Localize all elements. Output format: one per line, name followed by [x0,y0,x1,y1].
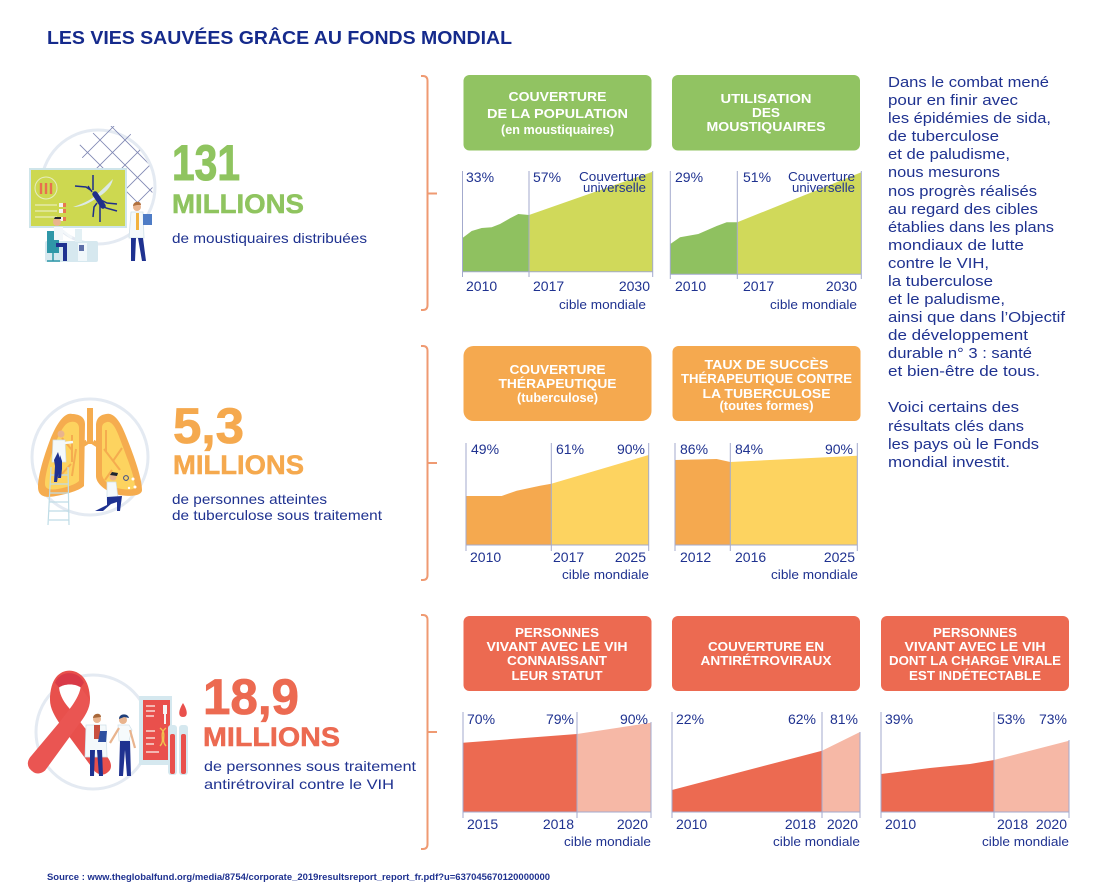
chart: charge virale indétectable: 73% [1039,711,1067,727]
chart: couverture thérapeutique: cible mondiale [562,567,649,582]
chart: couverture en antirétroviraux: 81% [830,711,858,727]
chart: connaissant leur statut: 2015 [467,816,498,832]
chart: couverture en antirétroviraux [672,711,860,849]
chart: connaissant leur statut: cible mondiale [564,834,651,849]
text block: intro: de développement [888,327,1029,344]
chart: utilisation des moustiquaires [670,169,861,312]
chart: couverture thérapeutique: 2010 [470,549,501,565]
chart: couverture en antirétroviraux: cible mondiale [773,834,860,849]
stat: 5,3 millions: MILLIONS [173,450,304,480]
chart: couverture thérapeutique: 61% [556,441,584,457]
text block: intro: nos progrès réalisés [888,183,1037,200]
title: LES VIES SAUVÉES GRÂCE AU FONDS MONDIAL [47,27,512,48]
text block: intro: établies dans les plans [888,219,1054,236]
text block: intro: au regard des cibles [888,201,1038,218]
header: couverture thérapeutique: COUVERTURE [510,362,606,377]
chart: couverture thérapeutique [466,441,649,582]
header: personnes connaissant leur statut: LEUR STATUT [512,668,603,683]
header: personnes connaissant leur statut: CONNAISSANT [507,653,607,668]
header: taux de succès thérapeutique: (toutes formes) [720,398,814,413]
bracket: tuberculosis [421,346,437,580]
header: utilisation des moustiquaires [672,75,860,150]
header: couverture en antirétroviraux: COUVERTURE EN [708,639,824,654]
chart: charge virale indétectable: 53% [997,711,1025,727]
chart: connaissant leur statut: 90% [620,711,648,727]
text block: intro: ainsi que dans l’Objectif [888,309,1066,326]
text block: intro: contre le VIH, [888,255,989,272]
stat: 5,3 millions: de tuberculose sous traitement [172,507,382,523]
chart: couverture de la population: 2030 [619,278,650,294]
header: personnes connaissant leur statut [464,616,652,691]
text block: intro: nous mesurons [888,164,1000,181]
chart: couverture de la population: Couverture [579,169,646,184]
text block: intro: durable n° 3 : santé [888,345,1032,362]
chart: charge virale indétectable: 2018 [997,816,1028,832]
chart: taux de succès thérapeutique: 2025 [824,549,855,565]
header: charge virale indétectable [881,616,1069,691]
chart: utilisation des moustiquaires: 29% [675,169,703,185]
chart: couverture thérapeutique: 90% [617,441,645,457]
header: couverture de la population [464,75,652,150]
chart: utilisation des moustiquaires: 2010 [675,278,706,294]
text block: intro: et bien-être de tous. [888,363,1040,380]
header: personnes connaissant leur statut: VIVANT AVEC LE VIH [486,639,628,654]
chart: couverture thérapeutique: 49% [471,441,499,457]
header: couverture de la population: DE LA POPULATION [487,106,628,121]
text block: intro: Dans le combat mené [888,74,1049,91]
chart: connaissant leur statut: 2020 [617,816,648,832]
source: Source : www.theglobalfund.org/media/8754/corporate_2019resultsreport_report_fr.pdf?u=637045670120000000 [47,872,550,882]
header: charge virale indétectable: PERSONNES [933,625,1017,640]
chart: couverture thérapeutique: 2017 [553,549,584,565]
chart: connaissant leur statut: 70% [467,711,495,727]
stat: 5,3 millions: 5,3 [173,398,244,454]
chart: charge virale indétectable: 2020 [1036,816,1067,832]
header: couverture en antirétroviraux [672,616,860,691]
bracket: malaria [421,76,437,310]
stat: 18,9 millions: 18,9 [203,669,299,725]
chart: charge virale indétectable [881,711,1069,849]
chart: taux de succès thérapeutique: 2016 [735,549,766,565]
chart: couverture en antirétroviraux: 2018 [785,816,816,832]
chart: couverture thérapeutique: 2025 [615,549,646,565]
text block: intro: et de paludisme, [888,146,1010,163]
chart: charge virale indétectable: 39% [885,711,913,727]
chart: utilisation des moustiquaires: 2030 [826,278,857,294]
stat: 18,9 millions: MILLIONS [203,722,340,752]
header: charge virale indétectable: DONT LA CHARGE VIRALE [889,653,1061,668]
illustration: HIV ribbon [28,671,188,789]
text block: intro: les épidémies de sida, [888,110,1051,127]
text block: intro: de tuberculose [888,128,999,145]
stat: 131 millions: MILLIONS [172,189,304,219]
text block: intro: Voici certains des [888,399,1019,416]
header: taux de succès thérapeutique: LA TUBERCULOSE [702,386,831,401]
header: utilisation des moustiquaires: MOUSTIQUAIRES [706,119,826,134]
chart: taux de succès thérapeutique [675,441,858,582]
chart: couverture de la population: 57% [533,169,561,185]
chart: couverture de la population: cible mondiale [559,297,646,312]
chart: taux de succès thérapeutique: 84% [735,441,763,457]
chart: couverture de la population: 33% [466,169,494,185]
text block: intro: pour en finir avec [888,92,1019,109]
chart: taux de succès thérapeutique: 2012 [680,549,711,565]
chart: utilisation des moustiquaires: 51% [743,169,771,185]
text block: intro: la tuberculose [888,273,993,290]
chart: couverture de la population [462,169,653,312]
stat: 131 millions [172,135,367,246]
chart: utilisation des moustiquaires: 2017 [743,278,774,294]
stat: 18,9 millions [203,669,416,792]
chart: connaissant leur statut: 2018 [543,816,574,832]
illustration: lungs [32,399,148,525]
illustration: mosquito research [29,126,156,262]
chart: couverture en antirétroviraux: 22% [676,711,704,727]
chart: connaissant leur statut [463,711,651,849]
chart: taux de succès thérapeutique: 86% [680,441,708,457]
header: charge virale indétectable: VIVANT AVEC LE VIH [904,639,1046,654]
header: taux de succès thérapeutique [672,346,860,421]
chart: taux de succès thérapeutique: cible mondiale [771,567,858,582]
text block: intro: résultats clés dans [888,418,1024,435]
stat: 5,3 millions [172,398,382,523]
chart: couverture en antirétroviraux: 2010 [676,816,707,832]
chart: connaissant leur statut: 79% [546,711,574,727]
header: couverture thérapeutique: THÉRAPEUTIQUE [498,376,617,391]
header: utilisation des moustiquaires: UTILISATION [720,91,812,106]
text block: intro: les pays où le Fonds [888,436,1039,453]
text block: intro: mondial investit. [888,454,1010,471]
header: couverture thérapeutique [464,346,652,421]
header: personnes connaissant leur statut: PERSONNES [515,625,599,640]
header: taux de succès thérapeutique: THÉRAPEUTIQUE CONTRE [681,371,852,386]
chart: taux de succès thérapeutique: 90% [825,441,853,457]
stat: 18,9 millions: antirétroviral contre le VIH [204,776,394,792]
chart: utilisation des moustiquaires: universelle [792,180,855,195]
header: couverture thérapeutique: (tuberculose) [517,390,598,405]
chart: couverture en antirétroviraux: 2020 [827,816,858,832]
header: couverture en antirétroviraux: ANTIRÉTROVIRAUX [700,653,832,668]
stat: 131 millions: 131 [172,135,240,191]
chart: charge virale indétectable: cible mondiale [982,834,1069,849]
header: couverture de la population: (en moustiquaires) [501,122,614,137]
chart: utilisation des moustiquaires: Couverture [788,169,855,184]
bracket: HIV [421,615,437,849]
text block: intro [888,74,1066,471]
text block: intro: et le paludisme, [888,291,1005,308]
stat: 131 millions: de moustiquaires distribuées [172,230,367,246]
header: utilisation des moustiquaires: DES [752,105,780,120]
header: taux de succès thérapeutique: TAUX DE SUCCÈS [704,357,829,372]
header: charge virale indétectable: EST INDÉTECTABLE [909,668,1041,683]
stat: 18,9 millions: de personnes sous traitement [204,758,416,774]
header: couverture de la population: COUVERTURE [508,89,607,104]
chart: utilisation des moustiquaires: cible mondiale [770,297,857,312]
chart: couverture de la population: 2010 [466,278,497,294]
chart: couverture de la population: universelle [583,180,646,195]
chart: couverture en antirétroviraux: 62% [788,711,816,727]
text block: intro: mondiaux de lutte [888,237,1024,254]
chart: couverture de la population: 2017 [533,278,564,294]
chart: charge virale indétectable: 2010 [885,816,916,832]
stat: 5,3 millions: de personnes atteintes [172,491,327,507]
